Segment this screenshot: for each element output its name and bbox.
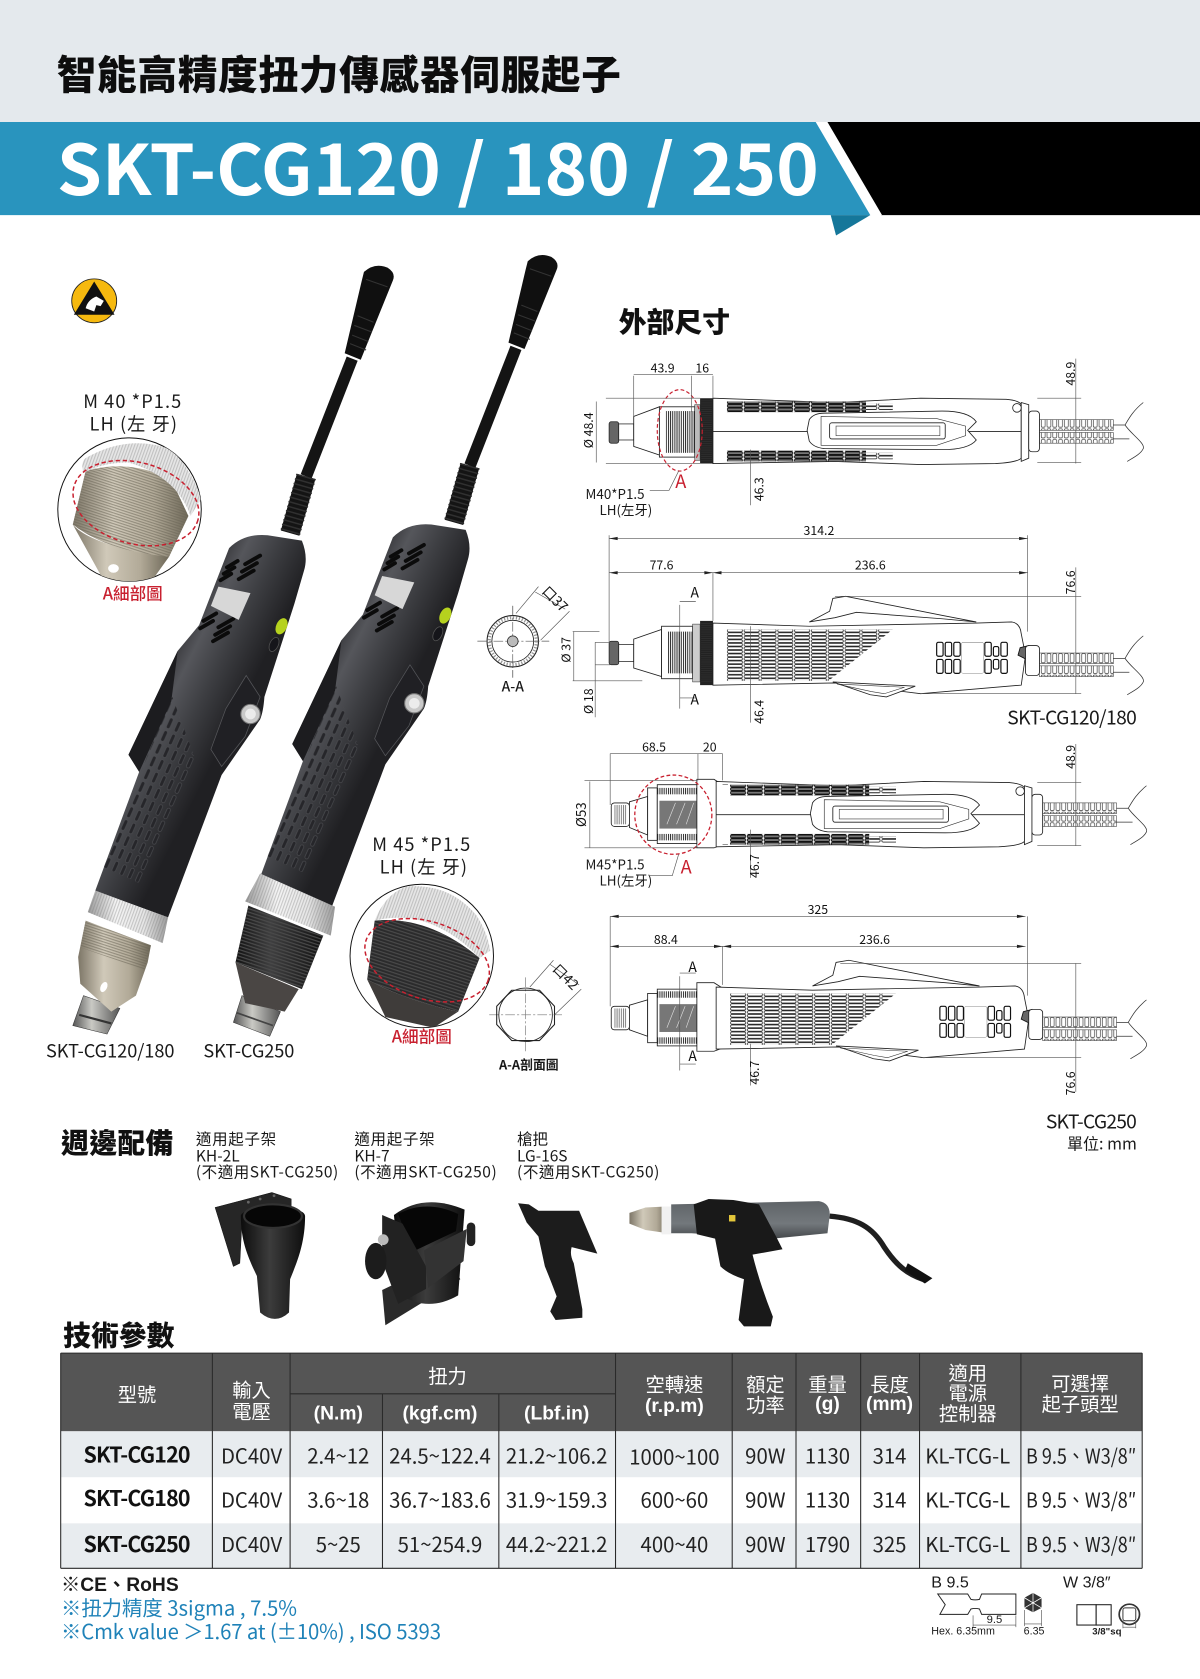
icon: bit B 9.5: B 9.5 <box>931 1574 969 1592</box>
table rows background <box>61 1431 1142 1568</box>
row: SKT-CG250: 325 <box>873 1528 906 1558</box>
row: SKT-CG180: 314 <box>873 1483 906 1513</box>
label: CG250 and unit <box>1046 1106 1137 1155</box>
drawing: CG120/180 top view: LH(左牙) <box>599 499 652 519</box>
label: M40 thread spec: M 40 *P1.5 <box>83 388 182 414</box>
row: SKT-CG250: 90W <box>745 1528 786 1558</box>
label: M45 thread spec: M 45 *P1.5 <box>372 831 471 857</box>
drawing: CG250 side view: 88.4 <box>654 930 678 948</box>
table header text: 扭力 <box>428 1361 467 1389</box>
table header text: (N.m) <box>314 1404 363 1425</box>
model banner <box>0 115 1200 236</box>
table header text: 額定 <box>746 1370 785 1398</box>
row: SKT-CG180: B 9.5、W3/8″ <box>1026 1483 1136 1513</box>
table header text: 可選擇 <box>1051 1369 1109 1397</box>
drawing: CG120/180 top view: 16 <box>695 359 709 377</box>
cross section A-A 250: 口42 <box>548 959 583 995</box>
row: SKT-CG250: 51~254.9 <box>398 1528 482 1558</box>
row: SKT-CG250: 44.2~221.2 <box>506 1528 607 1558</box>
drawing: CG120/180 side view: Ø 37 <box>557 637 575 663</box>
table header text: (kgf.cm) <box>403 1404 477 1425</box>
table header text: 控制器 <box>939 1399 997 1427</box>
drawing: CG250 side view: 46.7 <box>745 1061 763 1085</box>
drawing: CG120/180 side view: 46.4 <box>749 700 767 724</box>
text: KH-7: (不適用SKT-CG250) <box>354 1161 497 1183</box>
drawing: CG250 side view: A <box>688 957 697 977</box>
label: M40 thread spec: LH (左 牙) <box>90 410 178 436</box>
footnotes: ※扭力精度 3sigma , 7.5% <box>61 1591 297 1621</box>
row: SKT-CG250: DC40V <box>221 1528 282 1558</box>
text: LG-16S <box>517 1127 659 1183</box>
icon: bit W 3/8: W 3/8″ <box>1063 1574 1111 1592</box>
row: SKT-CG250: B 9.5、W3/8″ <box>1026 1528 1136 1558</box>
drawing: CG250 top view: 48.9 <box>1061 745 1079 769</box>
drawing: CG250 top view <box>570 738 1147 889</box>
photo: screwdriver SKT-CG120/180 <box>73 266 394 1034</box>
table header text: 長度 <box>870 1370 909 1398</box>
row: SKT-CG120: B 9.5、W3/8″ <box>1026 1439 1136 1469</box>
row: SKT-CG250: 1790 <box>805 1528 850 1558</box>
row: SKT-CG180: 3.6~18 <box>307 1483 369 1513</box>
heading: technical parameters: 技術參數 <box>63 1315 175 1355</box>
text: KH-7: 適用起子架 <box>354 1127 435 1149</box>
drawing: CG120/180 top view: 43.9 <box>651 359 675 377</box>
drawing: CG250 side view: 325 <box>808 900 828 918</box>
drawing: CG250 top view: 46.7 <box>745 854 763 878</box>
text: LG-16S: LG-16S <box>517 1145 568 1167</box>
table header text: 適用 <box>948 1358 987 1386</box>
icon: ESD warning <box>72 279 117 323</box>
table header text: (g) <box>815 1394 840 1415</box>
label: model right: SKT-CG250 <box>203 1038 294 1064</box>
drawing: CG120/180 side view: Ø 18 <box>579 688 597 714</box>
label: M45 thread spec: LH (左 牙) <box>380 854 468 880</box>
heading: product category: 智能高精度扭力傳感器伺服起子 <box>57 44 621 101</box>
label: M40 thread spec <box>83 388 182 436</box>
drawing: CG250 side view <box>610 900 1147 1095</box>
photo: screwdriver SKT-CG250 <box>233 255 558 1036</box>
row: SKT-CG120: 1000~100 <box>629 1440 720 1470</box>
cross section A-A <box>477 582 573 697</box>
footnotes: ※CE、RoHS <box>61 1575 179 1596</box>
text: KH-2L: (不適用SKT-CG250) <box>196 1161 338 1183</box>
row: SKT-CG120: SKT-CG120 <box>83 1438 191 1469</box>
drawing: CG120/180 side view: 76.6 <box>1061 570 1079 594</box>
row: SKT-CG250 <box>83 1528 1136 1559</box>
row: SKT-CG120: 24.5~122.4 <box>389 1439 491 1469</box>
row: SKT-CG120: 314 <box>873 1439 906 1469</box>
text: LG-16S: (不適用SKT-CG250) <box>517 1161 659 1183</box>
table header text <box>118 1358 1119 1427</box>
drawing: CG250 side view: 76.6 <box>1061 1071 1079 1095</box>
text: KH-2L: KH-2L <box>196 1145 240 1167</box>
row: SKT-CG120: KL-TCG-L <box>925 1439 1010 1469</box>
row: SKT-CG180: DC40V <box>221 1483 282 1513</box>
icon: bit W 3/8 <box>1063 1574 1140 1638</box>
drawing: CG250 top view: LH(左牙) <box>599 869 652 889</box>
row: SKT-CG120: 1130 <box>805 1439 850 1469</box>
drawing: CG120/180 side view: A <box>691 582 700 602</box>
model banner: SKT-CG120 / 180 / 250 <box>57 115 819 216</box>
table header background <box>61 1353 1142 1431</box>
icon: bit B 9.5 <box>931 1574 1045 1638</box>
row: SKT-CG120: 90W <box>745 1439 786 1469</box>
row: SKT-CG180: 90W <box>745 1483 786 1513</box>
row: SKT-CG180: 1130 <box>805 1483 850 1513</box>
table header text: 電源 <box>948 1378 987 1406</box>
icon: bit W 3/8: 3/8"sq <box>1092 1627 1122 1638</box>
row: SKT-CG180: 600~60 <box>641 1483 708 1513</box>
icon: bit B 9.5: 9.5 <box>987 1614 1002 1626</box>
table header text: (mm) <box>866 1394 913 1415</box>
text: KH-7 <box>354 1127 497 1183</box>
table header text: 功率 <box>746 1390 785 1418</box>
drawing: CG120/180 top view: M40*P1.5 <box>586 483 645 503</box>
icon: bit B 9.5: 6.35 <box>1024 1626 1045 1638</box>
text: KH-7: KH-7 <box>354 1145 390 1167</box>
text: LG-16S: 槍把 <box>517 1127 549 1149</box>
table header text: (Lbf.in) <box>524 1404 589 1425</box>
drawing: CG250 top view: Ø53 <box>570 802 590 827</box>
drawing: CG120/180 top view <box>579 359 1143 519</box>
row: SKT-CG180: KL-TCG-L <box>925 1483 1010 1513</box>
drawing: CG250 top view: 20 <box>703 738 717 756</box>
table header text: (r.p.m) <box>645 1396 704 1417</box>
detail callout: M45 thread <box>350 884 500 1028</box>
cross section A-A 250 <box>489 959 583 1073</box>
footnotes <box>61 1575 441 1645</box>
drawing: CG120/180 top view: Ø 48.4 <box>579 412 597 448</box>
text: KH-2L <box>196 1127 338 1183</box>
row: SKT-CG180: SKT-CG180 <box>83 1482 191 1513</box>
drawing: CG250 top view: 68.5 <box>642 738 666 756</box>
row: SKT-CG250: 400~40 <box>641 1528 708 1558</box>
row: SKT-CG250: KL-TCG-L <box>925 1528 1010 1558</box>
drawing: CG120/180 side view: A <box>691 689 700 709</box>
photo: grip with screwdriver <box>629 1199 932 1326</box>
drawing: CG120/180 top view: A <box>675 468 686 494</box>
photo: pistol grip LG-16S <box>518 1203 597 1320</box>
row: SKT-CG180 <box>83 1482 1136 1513</box>
row: SKT-CG120: DC40V <box>221 1439 282 1469</box>
photo: holder KH-7 <box>365 1202 475 1325</box>
cross section A-A: A-A <box>502 677 524 697</box>
cross section A-A 250: A-A剖面圖 <box>498 1054 559 1073</box>
label: CG250 and unit: 單位: mm <box>1067 1131 1137 1155</box>
drawing: CG120/180 side view: 314.2 <box>804 521 834 539</box>
label: A detail 1: A細部圖 <box>103 580 163 604</box>
label: model left: SKT-CG120/180 <box>46 1038 174 1064</box>
heading: accessories: 週邊配備 <box>61 1122 173 1162</box>
row: SKT-CG120: 2.4~12 <box>307 1439 369 1469</box>
label: M45 thread spec <box>372 831 471 880</box>
table header text: 起子頭型 <box>1042 1389 1119 1417</box>
table header text: 型號 <box>118 1379 156 1407</box>
table header text: 電壓 <box>232 1396 271 1424</box>
table header text: 輸入 <box>232 1375 271 1403</box>
footnotes: ※Cmk value ＞1.67 at (±10%) , ISO 5393 <box>61 1615 441 1645</box>
label: side view model: SKT-CG120/180 <box>1007 703 1137 731</box>
row: SKT-CG180: 31.9~159.3 <box>506 1483 607 1513</box>
row: SKT-CG120 <box>83 1438 1136 1470</box>
detail callout: M40 thread <box>58 438 209 587</box>
drawing: CG120/180 side view: 77.6 <box>650 556 674 574</box>
drawing: CG250 top view: M45*P1.5 <box>586 853 645 873</box>
row: SKT-CG120: 21.2~106.2 <box>506 1439 607 1469</box>
drawing: CG120/180 side view <box>557 521 1143 724</box>
drawing: CG120/180 side view: 236.6 <box>855 556 886 574</box>
drawing: CG250 side view: A <box>688 1046 697 1066</box>
drawing: CG250 side view: 236.6 <box>859 930 890 948</box>
row: SKT-CG180: 36.7~183.6 <box>389 1483 491 1513</box>
photo: holder KH-2L <box>215 1193 305 1319</box>
drawing: CG120/180 top view: 48.9 <box>1061 361 1079 386</box>
icon: bit B 9.5: Hex. 6.35mm <box>931 1626 995 1638</box>
label: CG250 and unit: SKT-CG250 <box>1046 1106 1137 1134</box>
label: A detail 2: A細部圖 <box>392 1024 452 1048</box>
row: SKT-CG250: 5~25 <box>316 1528 361 1558</box>
table: specifications <box>61 1353 1142 1568</box>
text: KH-2L: 適用起子架 <box>196 1127 276 1149</box>
heading: external dimensions: 外部尺寸 <box>619 301 730 341</box>
cross section A-A: 口37 <box>538 582 573 617</box>
header grey band <box>0 0 1200 122</box>
row: SKT-CG250: SKT-CG250 <box>83 1528 191 1559</box>
drawing: CG250 top view: A <box>681 854 692 880</box>
table header text: 重量 <box>808 1370 847 1398</box>
table header text: 空轉速 <box>646 1370 703 1398</box>
drawing: CG120/180 top view: 46.3 <box>749 477 767 501</box>
